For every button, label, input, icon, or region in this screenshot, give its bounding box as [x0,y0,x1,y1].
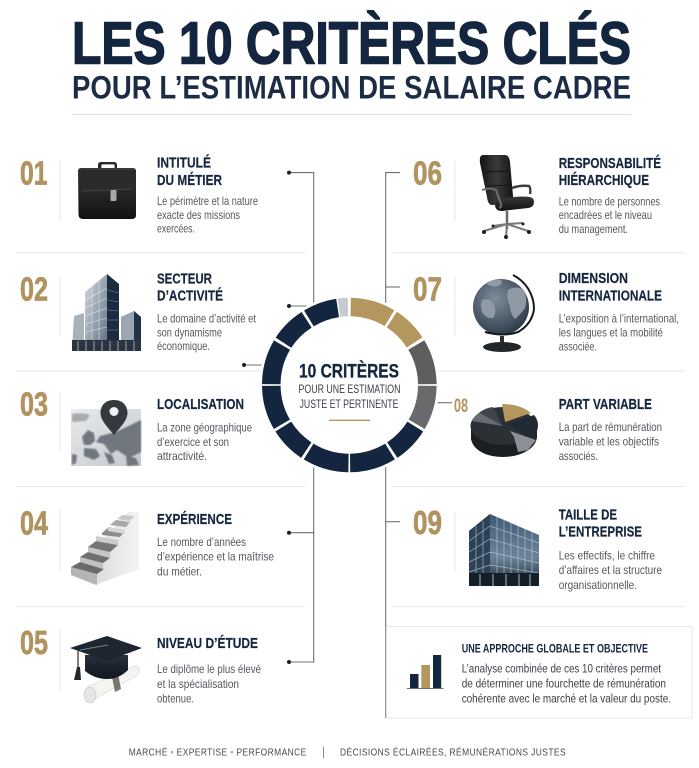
description: La part de rémunération [559,420,662,434]
icon: office chair [480,155,534,239]
center label: JUSTE ET PERTINENTE [300,397,399,411]
icon: office buildings [72,274,141,351]
criterion 07 [413,270,679,354]
callout heading: UNE APPROCHE GLOBALE ET OBJECTIVE [462,641,648,655]
description: exercées. [157,222,195,236]
description: Le nombre d’années [157,535,246,549]
criterion 01: DU MÉTIER [157,172,222,189]
criterion 03: 03 [20,385,48,422]
footer [129,746,566,759]
description: d’affaires et la structure [559,563,662,577]
heading: RESPONSABILITÉ [559,155,661,172]
criterion 03 [20,385,252,466]
description [157,662,261,706]
heading: LOCALISATION [157,396,244,413]
criterion 02: D’ACTIVITÉ [157,288,223,305]
footer: MARCHÉ • EXPERTISE • PERFORMANCE [129,746,307,759]
criterion 05: 05 [20,624,48,661]
description: obtenue. [157,692,194,706]
criterion 09: 09 [413,504,442,541]
criterion 01 [20,154,258,236]
heading: SECTEUR [157,270,212,287]
description [157,421,252,463]
icon: map with location pin [71,400,141,466]
description: attractivité. [157,449,207,463]
icon: 3D pie chart [470,404,538,457]
donut chart [259,295,439,475]
description: économique. [157,339,210,353]
segments as static arcs [351,307,390,318]
heading: EXPÉRIENCE [157,511,232,528]
description: et la spécialisation [157,677,239,691]
description [157,535,274,579]
description: du métier. [157,565,202,579]
description [559,312,679,354]
description [559,420,662,463]
description: son dynamisme [157,326,222,340]
description: exacte des missions [157,208,240,222]
description: Le domaine d’activité et [157,312,257,326]
description: d’expérience et la maîtrise [157,550,274,564]
description [559,548,662,592]
description: du management. [559,222,628,236]
description: encadrées et le niveau [559,208,652,222]
icon: globe [473,275,534,352]
heading: PART VARIABLE [559,396,652,413]
icon: corporate building [469,514,539,586]
criterion 02 [20,270,257,353]
connectors: left [242,171,314,664]
heading: DIMENSION [559,270,628,287]
description: La zone géographique [157,421,252,435]
icon: graduation cap and diploma [70,636,142,703]
criterion 06: HIÉRARCHIQUE [559,172,649,189]
criterion 04 [20,504,274,585]
criterion 06 [413,154,661,239]
criterion 09 [413,504,662,592]
description: organisationnelle. [559,578,637,592]
criterion 08 [454,396,662,463]
icon: staircase [71,512,139,585]
callout: global approach [386,626,692,718]
center label: 10 CRITÈRES [299,360,399,382]
criterion 06: 06 [413,154,442,192]
criterion 01: 01 [20,154,48,191]
heading: NIVEAU D’ÉTUDE [157,635,258,652]
description [559,195,660,236]
description: les langues et la mobilité [559,326,663,340]
description: Le nombre de personnes [559,195,660,209]
description: associée. [559,340,597,354]
footer: DÉCISIONS ÉCLAIRÉES, RÉMUNÉRATIONS JUSTES [340,746,566,759]
description: Le diplôme le plus élevé [157,662,261,676]
heading: INTITULÉ [157,155,211,172]
criterion 08: 08 [454,396,468,417]
heading: TAILLE DE [559,507,617,524]
description: Le périmètre et la nature [157,194,258,208]
criterion 07: INTERNATIONALE [559,288,662,305]
callout text [462,661,671,705]
title [72,10,631,106]
description: variable et les objectifs [559,435,659,449]
connectors: right [386,173,452,718]
description: d’exercice et son [157,435,229,449]
criterion 02: 02 [20,271,48,308]
criterion 05 [20,624,261,706]
description [157,194,258,236]
icon: briefcase [78,162,136,219]
criterion 04: 04 [20,504,48,541]
description: Les effectifs, le chiffre [559,548,655,562]
center label: POUR UNE ESTIMATION [298,382,400,396]
center label [298,360,400,420]
description: associés. [559,449,598,463]
criterion 07: 07 [413,270,442,308]
criterion 09: L’ENTREPRISE [559,524,642,541]
icon: bar chart [407,655,444,688]
description [157,312,257,353]
